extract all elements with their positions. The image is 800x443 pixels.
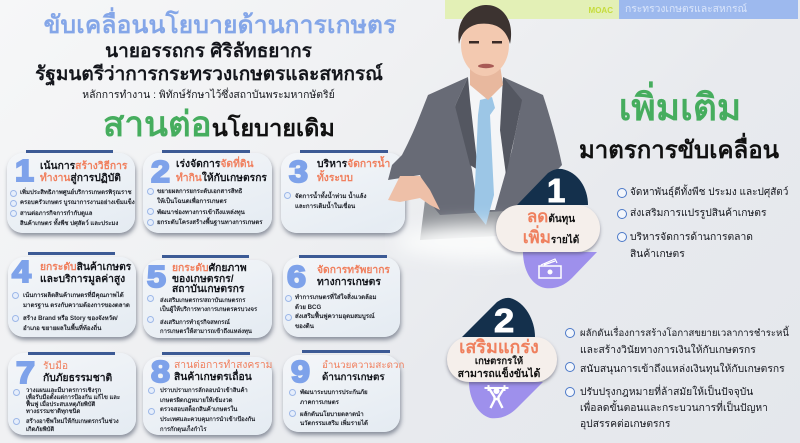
ministry name: กระทรวงเกษตรและสหกรณ์ <box>625 4 747 15</box>
list 7: เกิดภัยพิบัติ <box>26 427 54 433</box>
list 8: เกษตรผิดกฎหมายให้เข้มงวด <box>160 398 232 404</box>
list: measure 1: สินค้าเกษตร <box>630 249 685 260</box>
list 5: เป็นผู้ให้บริการทางการเกษตรครบวงจร <box>160 307 257 313</box>
heading 6: จัดการทรัพยากร <box>317 265 390 276</box>
list: measure 1: จัดหาพันธุ์ดีทั้งพืช ประมง และปศุสัตว์ <box>630 187 788 198</box>
list: measure 2: สนับสนุนการเข้าถึงแหล่งเงินทุนให้กับเกษตรกร <box>580 364 785 375</box>
person photo illustration <box>388 5 562 259</box>
heading 7: รับมือ <box>43 361 68 372</box>
heading 5: ของเกษตรกร/ <box>172 274 234 284</box>
heading: driving measures: มาตรการขับเคลื่อน <box>579 137 779 164</box>
list 4: เน้นการผลิตสินค้าเกษตรที่มีคุณภาพได้ <box>23 292 124 299</box>
list 5: ส่งเสริมการทำธุรกิจสหกรณ์ <box>160 320 230 326</box>
title: ขับเคลื่อนนโยบายด้านการเกษตร <box>44 12 396 39</box>
number 1: 1 <box>15 153 34 188</box>
heading 4 <box>40 261 132 286</box>
money icon <box>538 258 562 279</box>
list 7: เพื่อรับมือตั้งแต่การป้องกัน แก้ไข และ <box>26 395 120 401</box>
number 4: 4 <box>12 254 31 289</box>
list 4 <box>23 290 130 332</box>
list 2: ยกระดับโครงสร้างพื้นฐานทางการเกษตร <box>157 219 263 226</box>
number 3: 3 <box>289 154 308 189</box>
panel: item 4 <box>8 257 136 337</box>
list: measure 2: ปรับปรุงกฎหมายที่ล้าสมัยให้เป็นปัจจุบัน <box>580 387 753 398</box>
digit 2: 2 <box>494 302 514 339</box>
check marks on left cards <box>10 188 296 425</box>
heading 1: ทำงานสู่การปฏิบัติ <box>40 173 121 184</box>
jacket <box>388 77 562 225</box>
pill: strengthen farmers: เสริมแกร่ง <box>459 337 539 357</box>
heading 9: อำนวยความสะดวก <box>322 360 404 371</box>
MOAC label: MOAC <box>589 6 613 15</box>
list 6: ด้วย BCG <box>295 304 321 311</box>
badge 1 <box>494 168 602 288</box>
list: measure 1: บริหารจัดการด้านการตลาด <box>630 232 753 243</box>
list 1: ครอบครัวเกษตร บูรณาการงานอย่างเข้มแข็ง <box>20 200 135 206</box>
list 7: วางแผนและมีมาตรการเชิงรุก <box>26 388 101 394</box>
heading 9 <box>322 360 404 383</box>
panel: item 5 <box>143 260 272 338</box>
heading 7: กับภัยธรรมชาติ <box>43 372 112 384</box>
list 9: ภาคการเกษตร <box>300 398 339 406</box>
list 6: ทำการเกษตรที่ใส่ใจสิ่งแวดล้อม <box>295 294 377 301</box>
heading 8 <box>174 360 272 383</box>
number 8: 8 <box>151 354 170 389</box>
list 5 <box>160 297 258 335</box>
panel: item 8 <box>143 357 272 435</box>
list 1: สานต่อภารกิจการกำกับดูแล <box>20 211 92 217</box>
heading 5 <box>172 262 247 295</box>
list: measure 2: ผลักดันเรื่องการสร้างโอกาสขยายเวลาการชำระหนี้ <box>580 328 789 339</box>
digit 1: 1 <box>547 172 565 209</box>
list 9: พัฒนาระบบการประกันภัย <box>300 389 368 396</box>
list 2: ขยายผลการยกระดับเอกสารสิทธิ <box>157 188 242 195</box>
pill: strengthen farmers: สามารถแข็งขันได้ <box>458 368 540 380</box>
badge 2 <box>445 298 559 418</box>
list 4: สร้าง Brand หรือ Story ของจังหวัด/ <box>23 315 118 322</box>
pill: strengthen farmers: เกษตรกรให้ <box>475 356 523 367</box>
list 5: การเกษตรให้สามารถเข้าถึงแหล่งทุน <box>160 329 252 335</box>
heading 8: สานต่อการทำสงคราม <box>174 360 272 371</box>
heading 3: บริหารจัดการน้ำ <box>317 159 390 170</box>
list 1: สินค้าเกษตร ทั้งพืช ปศุสัตว์ และประมง <box>20 221 118 227</box>
neck and head <box>458 5 511 100</box>
list 8: ประเทศและควบคุมการนำเข้า/ป้องกัน <box>160 417 255 423</box>
number 5: 5 <box>147 259 166 294</box>
badge 1 shapes <box>517 168 597 288</box>
list 8: การกักตุนเก็งกำไร <box>160 427 206 433</box>
list 3: และการเติมน้ำในเขื่อน <box>295 203 355 210</box>
list 6: ส่งเสริมฟื้นฟูความอุดมสมบูรณ์ <box>295 313 375 320</box>
list 8: ปราบปรามการลักลอบนำเข้าสินค้า <box>160 388 248 394</box>
panel: item 2 <box>143 153 272 233</box>
list 7: สร้างอาชีพใหม่ให้กับเกษตรกรในช่วง <box>26 419 119 425</box>
number 9: 9 <box>291 354 310 389</box>
ministry banner <box>445 0 798 19</box>
list 5: ส่งเสริมเกษตรกร/สถาบันเกษตรกร <box>160 298 245 304</box>
heading 7 <box>43 360 112 384</box>
list: measure 2: อุปสรรคต่อเกษตรกร <box>580 419 670 430</box>
panel: item 6 <box>283 257 400 337</box>
number 2: 2 <box>151 154 170 189</box>
heading 9: ด้านการเกษตร <box>322 372 385 383</box>
MOAC label <box>445 0 619 19</box>
list 4: มาตรฐาน ตรงกับความต้องการของตลาด <box>23 302 130 309</box>
list 6 <box>295 292 377 330</box>
list: measure 1 <box>617 184 788 260</box>
list 9: นวัตกรรมเสริม เพิ่มรายได้ <box>300 420 368 427</box>
heading 6 <box>317 264 390 288</box>
list 8 <box>160 386 256 433</box>
ministry name <box>619 0 798 19</box>
panel: item 3 <box>281 153 405 233</box>
list 1: เพิ่มประสิทธิภาพศูนย์บริการเกษตรพิรุณราช <box>20 190 132 196</box>
list 3 <box>295 191 366 210</box>
heading 2: ทำกินให้กับเกษตรกร <box>176 172 267 184</box>
heading 6: ทางการเกษตร <box>317 277 381 288</box>
heading 3: ทั้งระบบ <box>317 173 353 184</box>
list: measure 1: ส่งเสริมการแปรรูปสินค้าเกษตร <box>630 208 767 219</box>
heading 1: เน้นการสร้างวิธีการ <box>40 161 127 172</box>
list 2: ให้เป็นโฉนดเพื่อการเกษตร <box>157 198 227 205</box>
pill: reduce cost raise income: เพิ่มรายได้ <box>523 228 579 247</box>
panel: item 1 <box>7 153 135 233</box>
heading 2 <box>176 156 267 184</box>
trousers <box>420 200 520 240</box>
heading 4: ยกระดับสินค้าเกษตร <box>40 262 131 273</box>
minister name: นายอรรถกร ศิริลัทธยากร <box>105 41 312 62</box>
list 9 <box>300 389 368 427</box>
panel: item 7 <box>8 353 136 435</box>
list 4: อำเภอ ขยายผลในพื้นที่ท้องถิ่น <box>23 325 101 332</box>
list 1 <box>20 188 135 227</box>
heading 4: และบริการมูลค่าสูง <box>40 274 125 285</box>
pill: reduce cost raise income <box>496 205 600 252</box>
list: measure 2: และสร้างวินัยทางการเงินให้กับเกษตรกร <box>580 345 756 356</box>
list 7 <box>26 386 120 433</box>
list 8: ตรวจสอบสต็อกสินค้าเกษตรใน <box>160 407 237 413</box>
heading 3 <box>317 156 390 184</box>
pill: reduce cost raise income: ลดต้นทุน <box>527 207 575 226</box>
working principle: หลักการทำงาน : พิทักษ์รักษาไว้ซึ่งสถาบันพระมหากษัตริย์ <box>82 90 335 101</box>
heading 8: สินค้าเกษตรเถื่อน <box>174 372 252 383</box>
number 7: 7 <box>16 355 35 390</box>
list 7: ฟื้นฟู เมื่อประสบเหตุภัยพิบัติ <box>26 402 95 408</box>
list: measure 2 <box>565 326 789 430</box>
list 2 <box>157 188 263 226</box>
panel: item 9 <box>283 355 400 432</box>
list 7: ทางธรรมชาติทุกชนิด <box>26 409 80 415</box>
weightlifter icon <box>484 385 508 408</box>
minister position: รัฐมนตรีว่าการกระทรวงเกษตรและสหกรณ์ <box>35 64 383 85</box>
list: measure 2: เพื่อลดขั้นตอนและกระบวนการที่เป็นปัญหา <box>580 403 768 414</box>
pill: strengthen farmers <box>447 337 557 382</box>
heading: continue existing policies: สานต่อนโยบายเดิม <box>103 105 335 144</box>
list 2: พัฒนาช่องทางการเข้าถึงแหล่งทุน <box>157 209 245 216</box>
heading: additional: เพิ่มเติม <box>619 87 741 128</box>
list 9: ผลักดันนโยบายตลาดนำ <box>300 410 364 418</box>
badge 2 shapes <box>462 298 543 418</box>
list 6: ของดิน <box>295 323 314 330</box>
heading 2: เร่งจัดการจัดที่ดิน <box>176 159 254 170</box>
heading 5: ยกระดับศักยภาพ <box>172 263 247 274</box>
number 6: 6 <box>287 259 306 294</box>
heading 1 <box>40 160 128 184</box>
heading 5: สถาบันเกษตรกร <box>172 284 244 295</box>
list 3: จัดการน้ำทั้งน้ำท่วม น้ำแล้ง <box>295 193 366 200</box>
